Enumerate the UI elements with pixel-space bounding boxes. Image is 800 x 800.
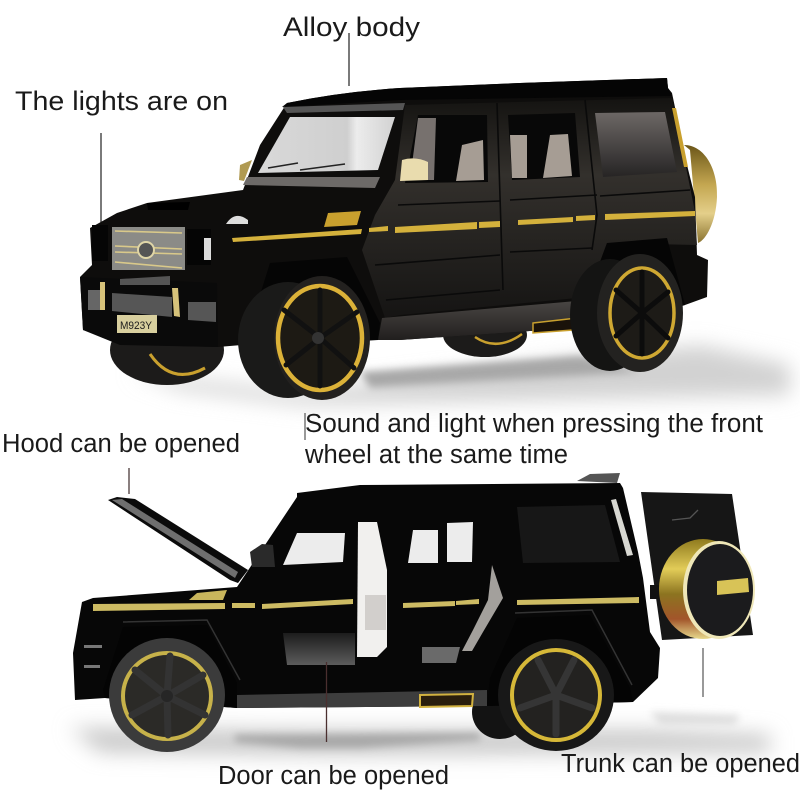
- hood highlight: [226, 216, 248, 224]
- ground shadow: [130, 345, 790, 405]
- far front wheel: [110, 315, 224, 385]
- licence plate: M923Y: [120, 320, 153, 332]
- body silhouette: [80, 78, 708, 347]
- bottom car: side view with doors open: [70, 473, 770, 755]
- far rear wheel: [443, 313, 527, 357]
- licence plate: [117, 315, 157, 333]
- open hood: [108, 497, 248, 583]
- front wheel arch: [103, 625, 237, 708]
- heading: Alloy body: Alloy body: [283, 12, 421, 42]
- gold side stripes: [93, 597, 639, 611]
- roof spoiler: [577, 473, 620, 483]
- rear window: [595, 112, 677, 177]
- rear wheel: [498, 639, 614, 751]
- rear wheel arch: [587, 238, 685, 320]
- hinge arm: [650, 585, 664, 599]
- front wheel arch: [250, 257, 380, 348]
- spare wheel: [684, 145, 717, 243]
- headlights: [92, 225, 211, 265]
- bumper: [80, 276, 218, 347]
- lower door reflection: [283, 633, 460, 665]
- smudge under trunk: [650, 712, 740, 725]
- contact shadow: [360, 356, 640, 388]
- arch highlight lines: [123, 610, 632, 685]
- far mirror: [239, 160, 252, 181]
- caption: hood can be opened: Hood can be opened: [2, 430, 240, 458]
- door emblem: [672, 510, 698, 520]
- sill: [378, 300, 588, 340]
- front bumper highlights: [84, 645, 102, 668]
- caption: door can be opened: Door can be opened: [218, 762, 449, 790]
- heading: The lights are on: The lights are on: [15, 86, 228, 116]
- sill: [237, 690, 487, 708]
- caption: trunk can be opened: Trunk can be opened: [561, 750, 800, 778]
- hood scoop: [147, 202, 190, 210]
- door seams and creases: [375, 100, 690, 300]
- exhaust: [420, 694, 473, 707]
- leader line: lights: [100, 133, 102, 236]
- grille: [112, 227, 185, 270]
- leader line: alloy body: [348, 33, 350, 86]
- leader line: hood: [128, 468, 130, 494]
- roof: [282, 78, 672, 107]
- gold side stripes: [232, 211, 695, 242]
- front door glass: [283, 533, 345, 565]
- door jamb light strip: [462, 565, 503, 651]
- mirror: [400, 158, 428, 181]
- open trunk door: [641, 492, 753, 640]
- fender vent: [324, 211, 361, 227]
- rear gold trim: [672, 108, 688, 167]
- caption: sound and light: Sound and light when pressing the front: [305, 410, 763, 438]
- wipers: [268, 163, 345, 170]
- caption: sound and light: wheel at the same time: [304, 441, 568, 469]
- ground shadow: [70, 728, 770, 755]
- body: [73, 483, 660, 708]
- far rear wheel: [472, 685, 528, 739]
- leader line: trunk: [702, 648, 704, 697]
- windshield: [258, 117, 395, 173]
- front wheel: [109, 638, 225, 752]
- top car: three-quarter view of black model: [80, 78, 790, 405]
- rear wheel arch: [487, 615, 633, 706]
- spare wheel: [659, 539, 755, 639]
- door panels: [362, 98, 697, 318]
- rear wheel: [570, 254, 683, 372]
- spare tag: [717, 578, 749, 595]
- seat: [365, 595, 386, 630]
- rear window: [517, 505, 620, 563]
- white rear trim: [611, 499, 633, 556]
- door window 1: [405, 115, 488, 183]
- mirror: [250, 544, 275, 567]
- door window 2: [508, 113, 580, 180]
- door opening: [357, 522, 387, 657]
- leader line: door: [326, 662, 328, 742]
- caption: sound and light: [304, 410, 763, 469]
- fender vent: [189, 590, 227, 600]
- windshield frame: [243, 103, 405, 188]
- rear door glass: [408, 522, 473, 563]
- contact shadow: [235, 733, 480, 748]
- front wheel: [238, 276, 370, 400]
- exhaust: [533, 318, 577, 333]
